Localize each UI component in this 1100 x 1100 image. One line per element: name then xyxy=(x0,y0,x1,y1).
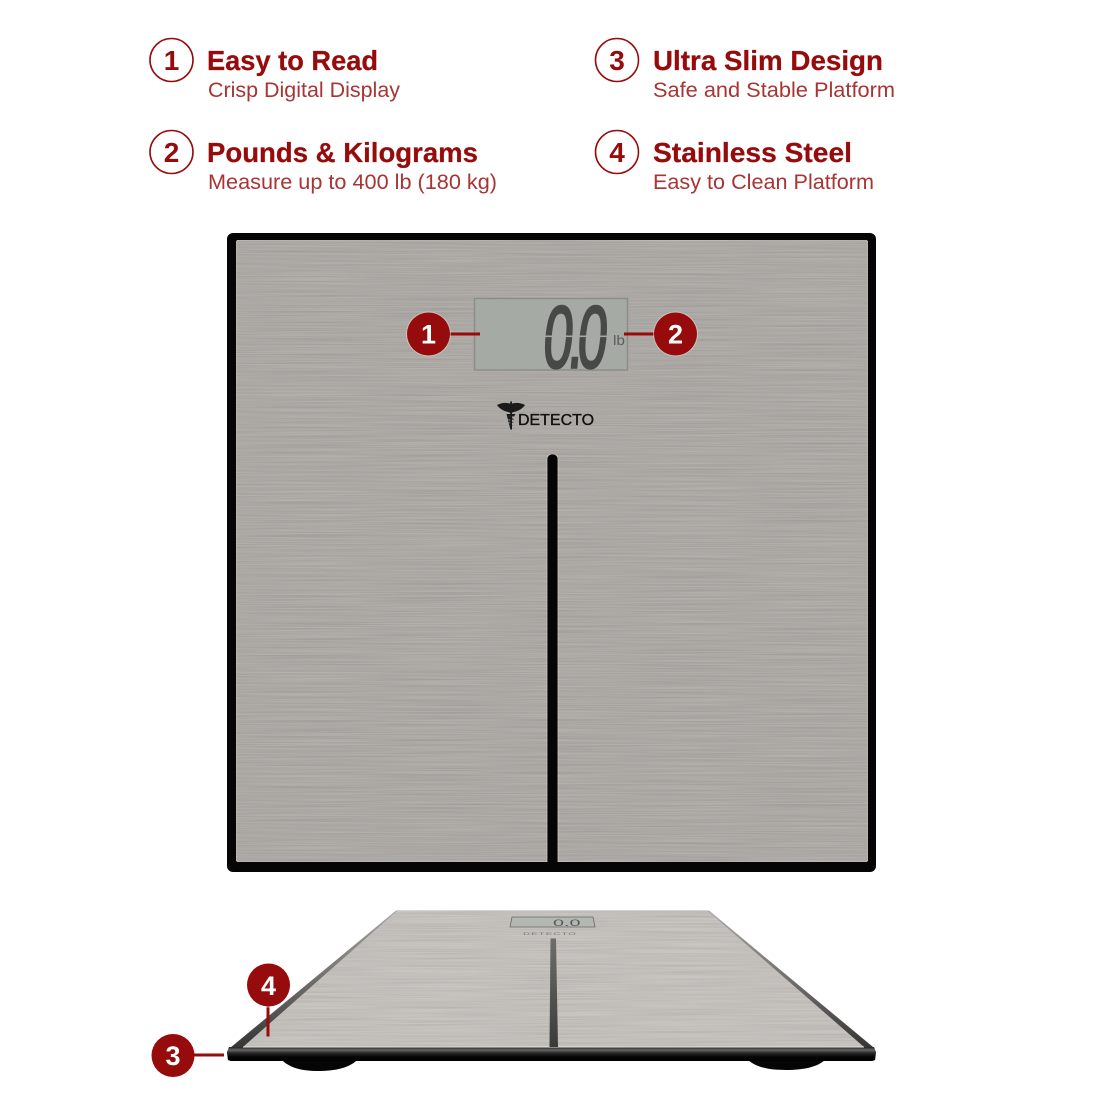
detecto logo: DETECTO xyxy=(518,412,594,429)
feature 3: ultra slim design: Safe and Stable Platform xyxy=(653,79,895,102)
feature 1: easy to read: Crisp Digital Display xyxy=(208,79,401,102)
feature 4: stainless steel: 4 xyxy=(609,137,625,168)
platform front highlight xyxy=(243,1046,864,1048)
feature 1: easy to read: 1 xyxy=(164,45,179,76)
caduceus emblem xyxy=(497,402,525,430)
feature 3: ultra slim design: 3 xyxy=(609,45,625,76)
platform slot xyxy=(550,938,558,1047)
steel platform in perspective xyxy=(243,911,864,1047)
front edge band xyxy=(227,1047,876,1061)
feature 2: pounds and kilograms: 2 xyxy=(164,137,179,168)
callout 4: steel platform: 4 xyxy=(261,971,276,1001)
lcd unit: lb xyxy=(613,332,625,348)
callout 1: display xyxy=(406,312,480,356)
lcd reading xyxy=(540,289,612,387)
feature 4: stainless steel: Easy to Clean Platform xyxy=(653,171,874,194)
feature 1: easy to read: Easy to Read xyxy=(207,45,378,76)
mini logo: DETECTO xyxy=(523,932,577,936)
perspective view of scale xyxy=(227,910,876,1071)
feature 2: pounds and kilograms: Pounds & Kilograms xyxy=(207,137,478,168)
glass frame edge xyxy=(227,910,876,1061)
mini display xyxy=(510,917,595,928)
lcd display xyxy=(474,289,628,387)
callout 3: slim edge: 3 xyxy=(165,1041,181,1071)
callout 2: units xyxy=(624,312,698,356)
feature 2: pounds and kilograms xyxy=(150,130,497,194)
feature 1: easy to read xyxy=(150,38,401,102)
top view of scale xyxy=(227,233,876,872)
lcd reading: 0 xyxy=(574,289,612,387)
callout 2: units: 2 xyxy=(668,320,683,350)
scale feet xyxy=(281,1059,826,1071)
feature 2: pounds and kilograms: Measure up to 400 lb (180 kg) xyxy=(208,171,497,194)
callout 3: slim edge xyxy=(152,1034,224,1077)
feature 3: ultra slim design xyxy=(596,38,895,102)
callout 1: display: 1 xyxy=(421,320,436,350)
feature 4: stainless steel: Stainless Steel xyxy=(653,137,852,168)
black glass frame xyxy=(227,233,876,872)
feature 4: stainless steel xyxy=(596,130,874,194)
feature 3: ultra slim design: Ultra Slim Design xyxy=(653,45,883,76)
lcd reading: . xyxy=(565,289,588,387)
mini display: 0.0 xyxy=(553,919,581,928)
lcd reading: 0 xyxy=(540,289,578,387)
callout 4: steel platform xyxy=(246,962,291,1036)
feature list xyxy=(150,38,895,194)
detecto logo xyxy=(497,402,594,430)
stainless steel platform xyxy=(236,240,868,862)
